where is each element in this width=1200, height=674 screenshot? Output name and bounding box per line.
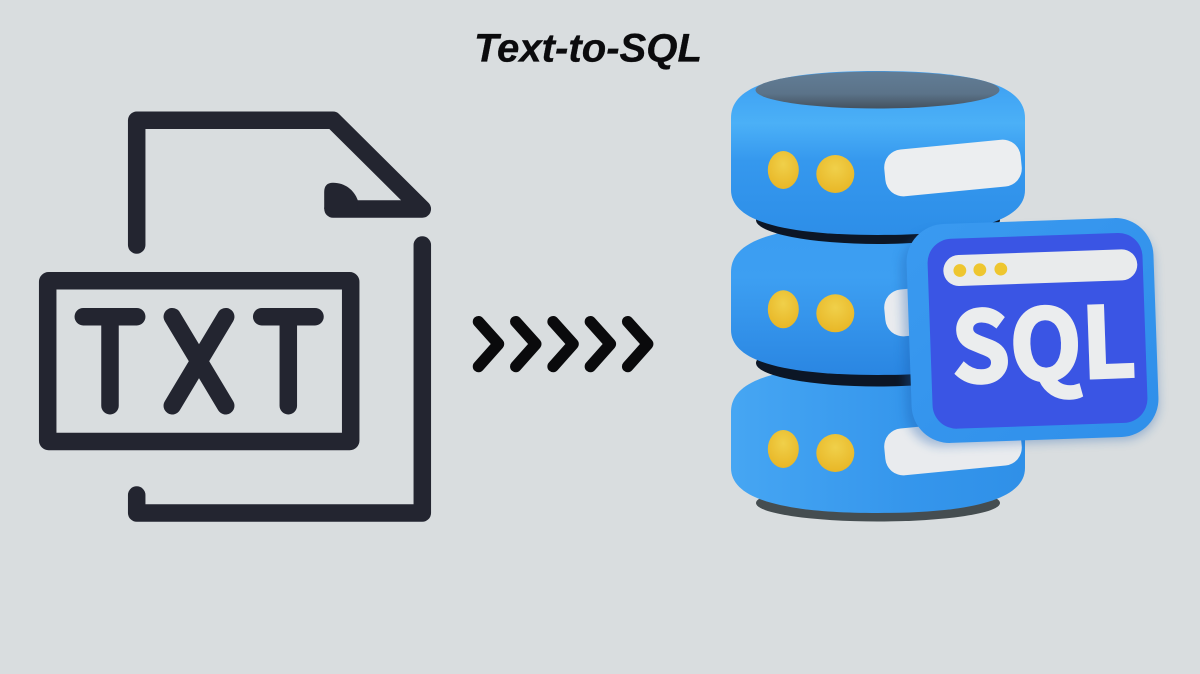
SQL card [899,217,1160,447]
base shadow [756,484,1000,522]
gap shadow 1 [756,196,1000,244]
database layer 2 [731,225,1025,375]
SQL text: SQL [949,263,1138,411]
database layer 3 [731,365,1025,513]
letter T [262,317,315,406]
letter X [172,317,226,406]
database layer 1 [731,71,1025,235]
dark top surface [756,72,1000,108]
icon: TXT document [48,120,422,513]
letter T [83,317,137,406]
arrows: five chevrons [478,322,648,366]
icon: database with SQL card [731,71,1160,522]
card title bar [943,249,1138,287]
title: Text-to-SQL [474,26,702,70]
gap shadow 2 [756,340,1000,386]
document upper outline with folded corner [137,120,422,245]
document lower outline [137,245,422,513]
TXT label box [48,281,351,442]
folded corner blob [324,183,358,212]
